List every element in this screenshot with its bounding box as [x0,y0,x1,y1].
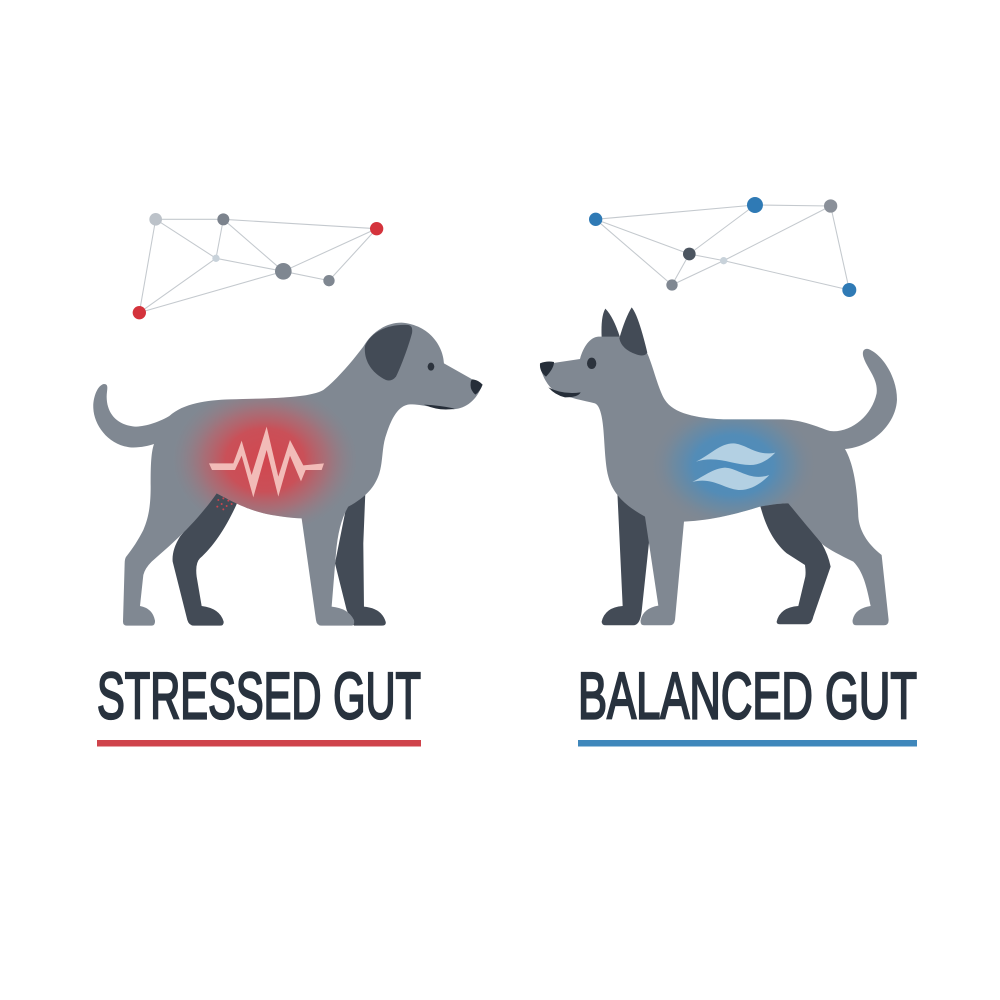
red speckles on hind leg [216,497,233,510]
panel: balanced gut microbiome network [589,197,856,297]
body [540,337,897,625]
panel: stressed gut microbiome network [133,213,383,319]
near ear [619,307,647,355]
mouth [424,405,455,410]
underline: balanced gut [578,740,917,746]
far front leg [602,492,650,625]
icon: stress pulse line [209,427,324,497]
far ear [601,309,620,337]
eye [587,358,596,369]
far hind leg [173,492,237,626]
nose [540,362,554,377]
icon: calm waves [692,443,775,490]
upper wave [696,443,775,465]
far hind leg [760,502,831,624]
lower wave [692,468,769,490]
mouth [548,387,581,397]
nose [471,379,483,395]
heading: stressed gut: STRESSED GUT [97,658,421,732]
far front leg [335,493,386,626]
illustration: balanced dog [540,307,897,625]
blue calm glow [666,416,801,518]
red inflammation glow [184,397,346,519]
illustration: stressed dog [93,323,483,626]
underline: stressed gut [97,740,421,746]
ear [365,325,412,381]
eye [428,363,434,371]
body [93,323,482,626]
